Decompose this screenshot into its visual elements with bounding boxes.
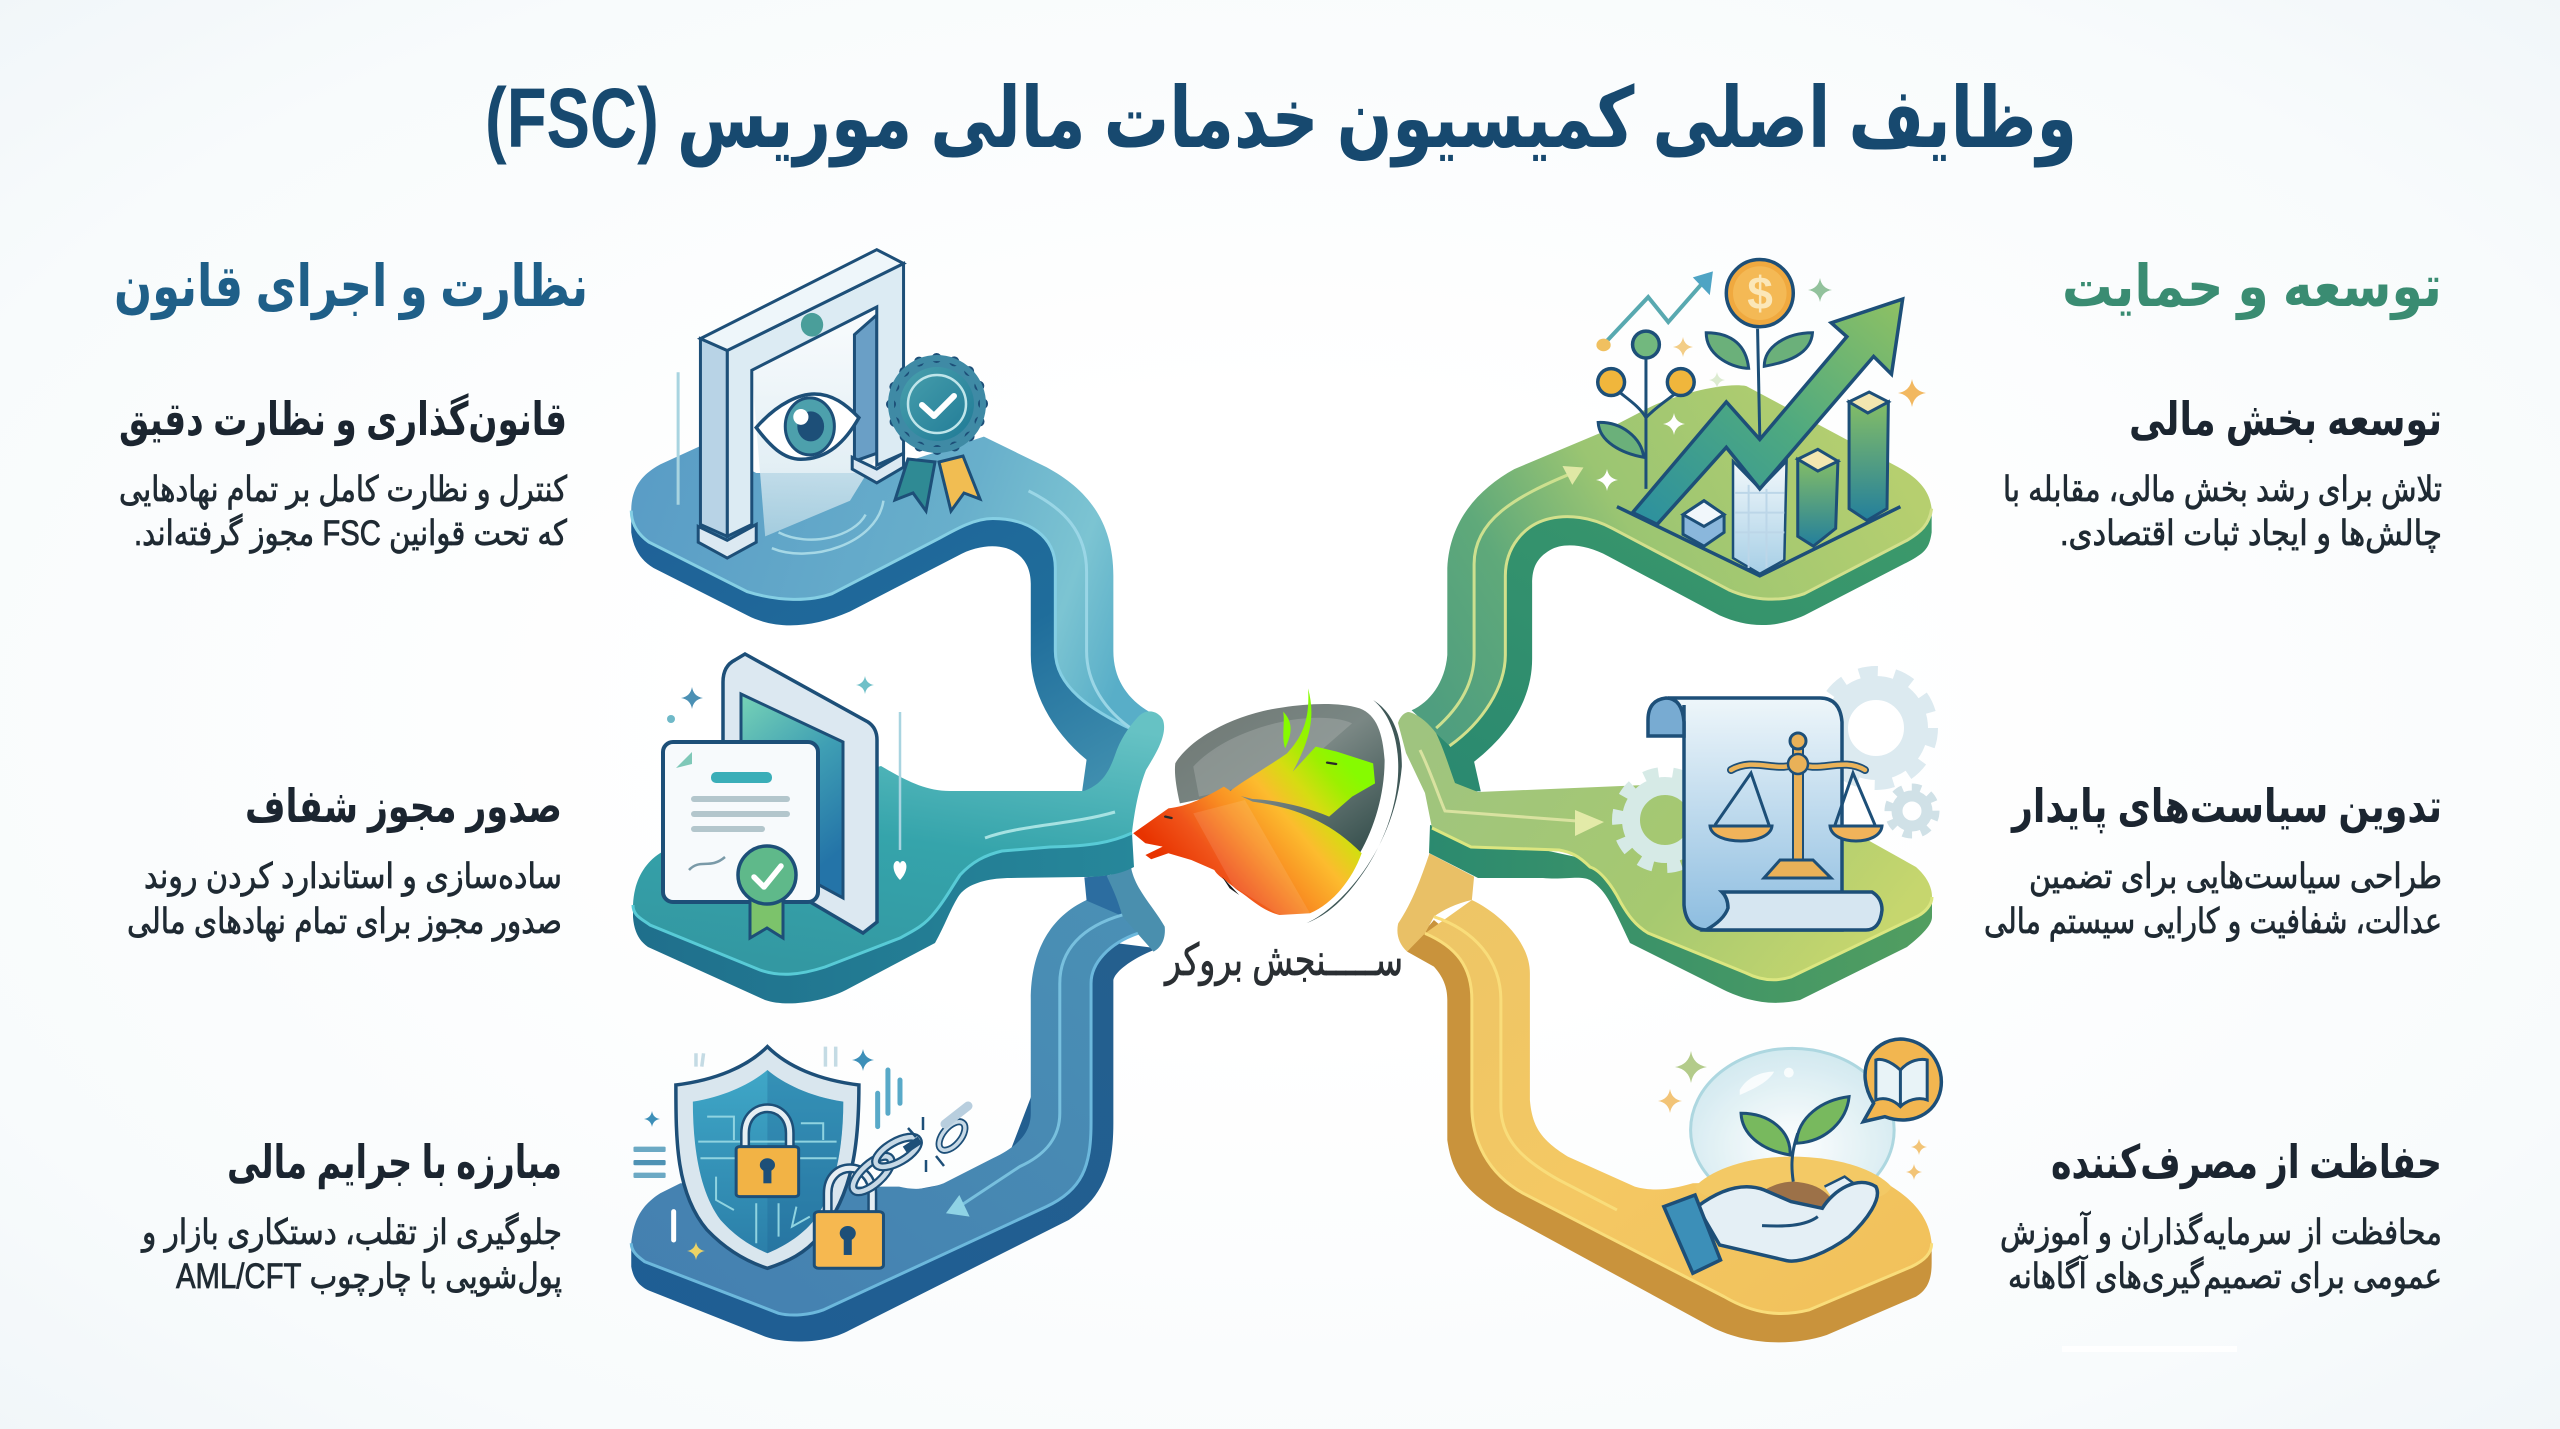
icon: policy scroll with scales and gears — [1619, 674, 1935, 930]
white bar bottom right — [2062, 1346, 2237, 1352]
text block: regulation and supervision — [119, 393, 567, 554]
text block: consumer protection — [2000, 1136, 2442, 1297]
text block: transparent licensing: ساده‌سازی و استاندارد کردن روند — [144, 857, 562, 897]
text block: sustainable policy making: تدوین سیاست‌های پایدار — [2010, 780, 2442, 834]
text block: financial sector development — [2003, 393, 2442, 554]
ribbon: bottom-left blue path — [631, 868, 1165, 1342]
text block: financial sector development: تلاش برای رشد بخش مالی، مقابله با — [2003, 470, 2442, 510]
text block: regulation and supervision: کنترل و نظارت کامل بر تمام نهادهایی — [119, 470, 567, 510]
text block: fighting financial crime: پول‌شویی با چارچوب AML/CFT — [176, 1257, 562, 1297]
ribbon: bottom-right yellow path — [1397, 853, 1932, 1342]
text block: sustainable policy making: عدالت، شفافیت و کارایی سیستم مالی — [1984, 902, 2442, 942]
text block: sustainable policy making: طراحی سیاست‌هایی برای تضمین — [2029, 857, 2442, 897]
icon: broken chain and sparkles — [644, 1049, 970, 1260]
ribbon: middle-left teal path — [633, 711, 1164, 1003]
ribbon: middle-right green path — [1398, 712, 1932, 1003]
text block: fighting financial crime: جلوگیری از تقلب، دستکاری بازار و — [140, 1212, 562, 1253]
icon: shield with locks — [633, 1047, 900, 1268]
logo wordmark: ســـــنجش بروکر — [1163, 936, 1403, 986]
text block: fighting financial crime: مبارزه با جرایم مالی — [227, 1136, 562, 1189]
title: وظایف اصلی کمیسیون خدمات مالی موریس (FSC) — [485, 71, 2077, 168]
heading: development column: توسعه و حمایت — [2062, 254, 2442, 321]
text block: consumer protection: عمومی برای تصمیم‌گیری‌های آگاهانه — [2008, 1254, 2442, 1297]
ribbon: top-right green path — [1412, 385, 1932, 791]
heading: oversight column: نظارت و اجرای قانون — [114, 254, 588, 321]
text block: consumer protection: حفاظت از مصرف‌کننده — [2051, 1136, 2442, 1189]
icon: license document and door — [663, 654, 906, 938]
text block: financial sector development: توسعه بخش مالی — [2129, 393, 2442, 446]
text block: fighting financial crime — [140, 1136, 562, 1297]
icon: coin dollar sign and chart sparkles: $ — [1747, 267, 1773, 319]
text block: transparent licensing: صدور مجوز برای تمام نهادهای مالی — [127, 902, 562, 942]
icon: surveillance gate with eye and medal — [678, 250, 904, 558]
logo: sanjesh broker — [1133, 688, 1402, 923]
icon: protective dome with hand, plant and book bubble — [1664, 1039, 1941, 1273]
icon: coin dollar sign and chart sparkles — [1596, 267, 1926, 491]
text block: transparent licensing: صدور مجوز شفاف — [245, 780, 562, 833]
icon: dome sparkles — [1658, 1051, 1927, 1180]
text block: consumer protection: محافظت از سرمایه‌گذاران و آموزش — [2000, 1210, 2442, 1253]
text block: sustainable policy making — [1984, 780, 2442, 942]
text block: regulation and supervision: قانون‌گذاری و نظارت دقیق — [119, 393, 567, 446]
icon: approval medal — [891, 358, 983, 511]
text block: financial sector development: چالش‌ها و ایجاد ثبات اقتصادی. — [2060, 514, 2442, 554]
ribbon: top-left blue path — [631, 437, 1154, 791]
text block: transparent licensing — [127, 780, 562, 942]
icon: growth chart with plants and coin — [1596, 260, 1903, 576]
text block: regulation and supervision: که تحت قوانین FSC مجوز گرفته‌اند. — [134, 513, 567, 554]
